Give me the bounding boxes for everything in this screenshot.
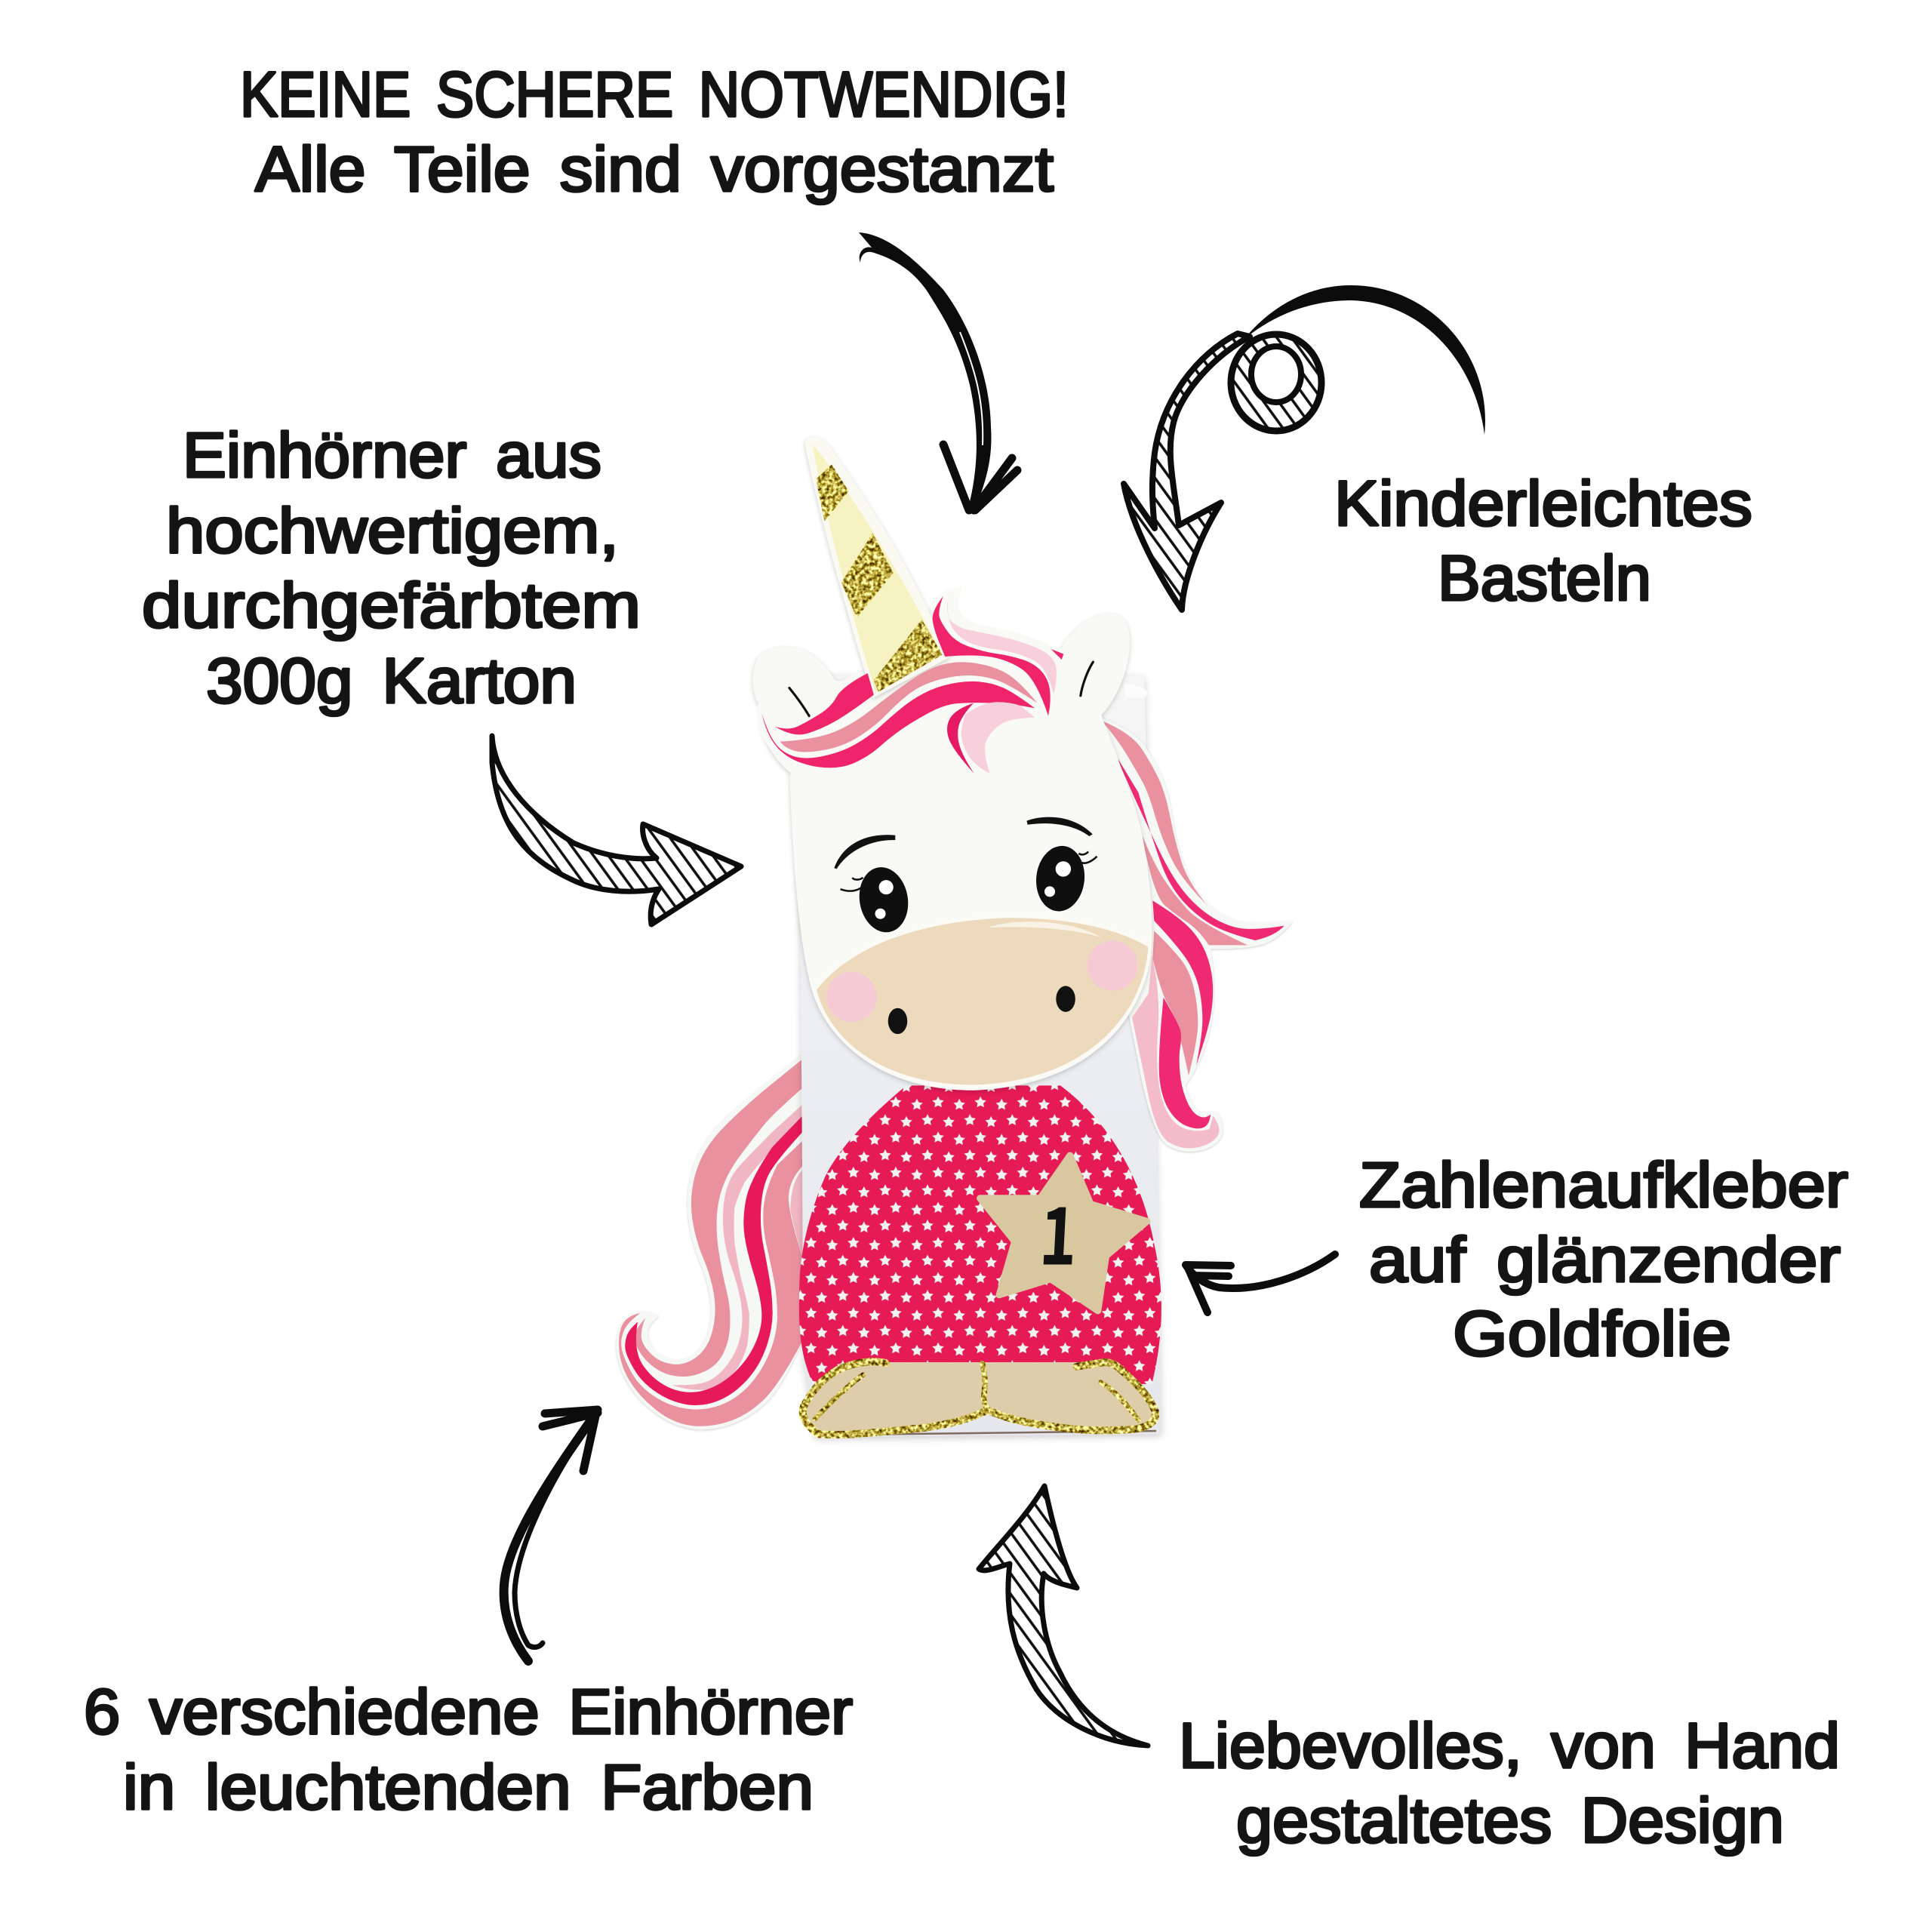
text: design	[1179, 1710, 1840, 1856]
mane	[756, 437, 1067, 775]
illustration: unicorn paper bag	[617, 437, 1293, 1437]
paper bag	[798, 675, 1161, 1437]
arrow: bottom left thin	[504, 1410, 598, 1661]
muzzle	[815, 916, 1150, 1087]
text: cardboard	[142, 420, 641, 716]
nostrils	[888, 986, 1075, 1034]
text: design: Liebevolles, von Hand	[1179, 1710, 1840, 1781]
text: cardboard: hochwertigem,	[166, 495, 619, 566]
cheeks	[826, 940, 1137, 1022]
text: top headline: KEINE SCHERE NOTWENDIG!	[240, 59, 1069, 130]
text: design: gestaltetes Design	[1236, 1785, 1784, 1856]
text: six unicorns: in leuchtenden Farben	[123, 1752, 814, 1823]
muzzle highlight	[988, 921, 1101, 937]
horn	[805, 437, 949, 698]
text: easy crafting: Basteln	[1438, 543, 1651, 614]
number star	[980, 1155, 1147, 1311]
face	[789, 662, 1150, 1087]
text: easy crafting: Kinderleichtes	[1334, 468, 1752, 539]
left eye	[834, 835, 913, 936]
text: cardboard: durchgefärbtem	[142, 570, 641, 641]
text: top headline	[240, 59, 1069, 205]
text: number stickers: Goldfolie	[1453, 1298, 1731, 1369]
head	[753, 614, 1152, 1091]
text: cardboard: Einhörner aus	[183, 420, 601, 491]
right eye	[1026, 817, 1097, 914]
text: number stickers: Zahlenaufkleber	[1359, 1149, 1848, 1220]
text: six unicorns	[84, 1676, 853, 1823]
arrow: right small	[1186, 1254, 1335, 1312]
arrow: left hatched	[492, 736, 741, 924]
text: top headline: Alle Teile sind vorgestanzt	[255, 134, 1054, 205]
text: easy crafting	[1334, 468, 1752, 614]
text: cardboard: 300g Karton	[206, 645, 577, 716]
right hair	[1100, 717, 1293, 1152]
text: number stickers: auf glänzender	[1369, 1224, 1841, 1295]
body with star pattern	[799, 1085, 1161, 1384]
glitter feet	[801, 1361, 1157, 1435]
arrow: top thin	[859, 232, 1017, 510]
ear lines	[789, 662, 1093, 716]
lower left hair	[617, 1054, 802, 1429]
text: six unicorns: 6 verschiedene Einhörner	[84, 1676, 853, 1747]
arrow: bottom right hatched	[979, 1486, 1148, 1746]
arrow: loop right hatched	[1124, 285, 1485, 610]
number 1: 1	[1037, 1173, 1081, 1288]
text: number stickers	[1359, 1149, 1848, 1369]
bag tab	[1124, 683, 1147, 698]
